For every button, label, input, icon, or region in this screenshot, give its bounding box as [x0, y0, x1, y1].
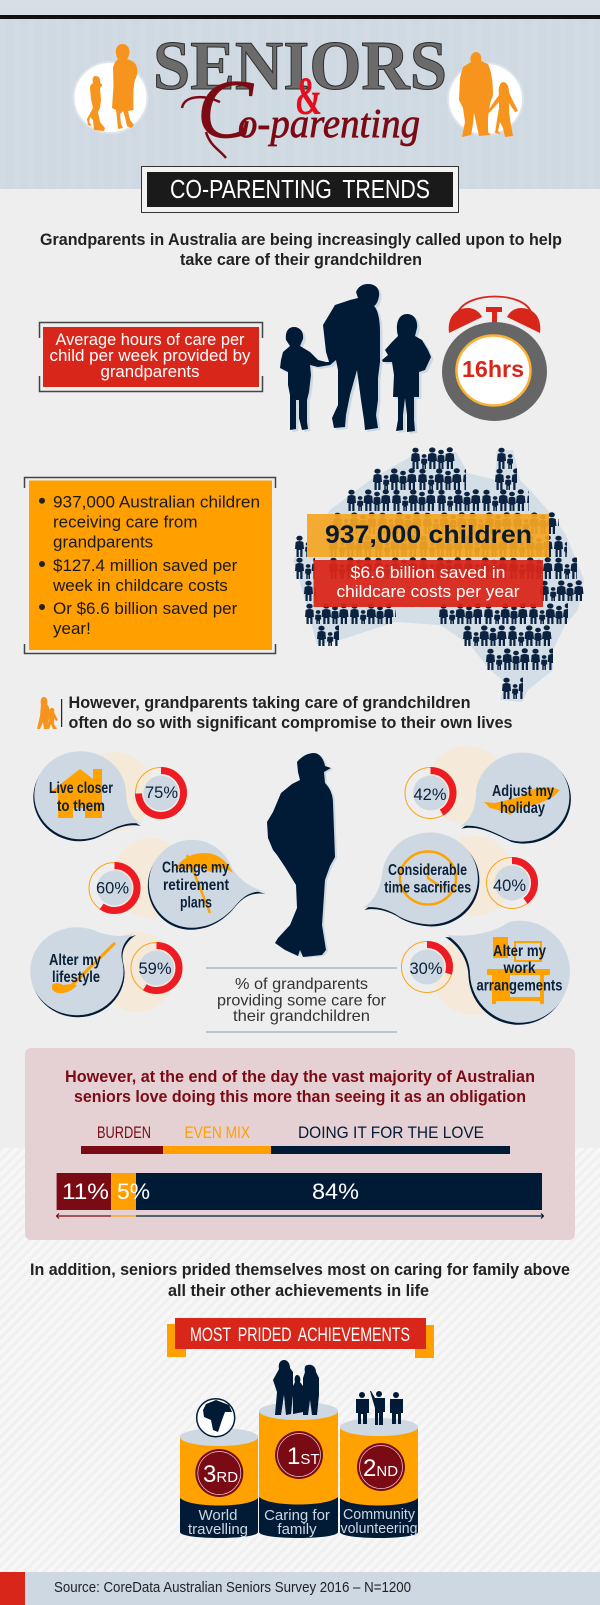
- panel: key statistics list: $127.4 million saved per: [53, 556, 238, 575]
- title: Co-parenting: o-parenting: [238, 100, 420, 146]
- silhouette: grandparent standing: [267, 753, 337, 958]
- panel: motivation stacked bar: [25, 1048, 575, 1240]
- pride text: In addition, seniors prided themselves most on caring for family above: [30, 1260, 570, 1279]
- podium: 1st caring for family: family: [277, 1521, 317, 1538]
- panel heading: [65, 1067, 535, 1106]
- callout: average hours of care: grandparents: [100, 362, 200, 381]
- map: Australia made of people: 937,000 children: [325, 521, 532, 549]
- bubble: live closer to them: Live closer: [49, 780, 113, 797]
- footer source bar: [0, 1572, 600, 1605]
- icon: grandmother and child in circle: [74, 44, 148, 133]
- podium: 3rd world travelling: World: [199, 1507, 237, 1524]
- podium: 3rd world travelling: [180, 1399, 258, 1538]
- bubble: adjust my holiday: [427, 746, 571, 844]
- panel: key statistics list: week in childcare costs: [52, 576, 228, 595]
- section heading: co-parenting trends: CO-PARENTING TRENDS: [170, 174, 430, 204]
- donut: 40%: [486, 858, 538, 908]
- bubble: alter my work arrangements: Alter my: [493, 943, 546, 960]
- bubble: alter my work arrangements: arrangements: [476, 978, 563, 994]
- bubble: change my retirement plans: plans: [180, 894, 212, 912]
- icon: golf club: [52, 943, 115, 993]
- donut: 75%: 75%: [145, 783, 178, 802]
- bubble: considerable time sacrifices: time sacrifices: [384, 880, 471, 897]
- panel heading: seniors love doing this more than seeing it as an obligation: [74, 1087, 526, 1106]
- caption: percent of grandparents: % of grandparents: [235, 976, 368, 993]
- bubble: change my retirement plans: Change my: [162, 860, 229, 877]
- icon: alarm clock 16hrs: [442, 296, 547, 421]
- panel: key statistics list: receiving care from: [53, 512, 198, 532]
- legend labels: EVEN MIX: [184, 1123, 250, 1142]
- legend labels: [97, 1123, 484, 1142]
- podium: 1st caring for family: [259, 1360, 338, 1538]
- legend labels: DOING IT FOR THE LOVE: [298, 1123, 484, 1142]
- callout: average hours of care: child per week provided by: [50, 346, 251, 365]
- donut: 30%: 30%: [410, 959, 442, 978]
- rank badge: [275, 1431, 323, 1479]
- legend bar: [81, 1146, 510, 1154]
- panel: key statistics list: [24, 478, 276, 654]
- icon: plane: [484, 787, 560, 815]
- caption: percent of grandparents: their grandchildren: [233, 1008, 370, 1025]
- bubble: live closer to them: to them: [57, 798, 105, 815]
- title: Seniors: SENIORS: [153, 28, 447, 105]
- icon: family: [273, 1360, 319, 1415]
- caption: percent of grandparents: [206, 968, 397, 1032]
- podium: 3rd world travelling: travelling: [188, 1521, 248, 1538]
- bubble: considerable time sacrifices: [363, 833, 513, 926]
- icon: umbrella: [175, 853, 233, 913]
- icon: grandfather and child in circle: [448, 52, 523, 137]
- donut: 42%: [405, 768, 456, 818]
- caption: percent of grandparents: providing some care for: [217, 992, 387, 1010]
- bubble: adjust my holiday: Adjust my: [492, 783, 554, 800]
- callout: average hours of care: Average hours of care per: [56, 330, 245, 349]
- legend labels: BURDEN: [97, 1123, 151, 1142]
- podium: 2nd community volunteering: [340, 1391, 418, 1538]
- panel: key statistics list: 937,000 Australian children: [53, 492, 260, 512]
- subheading with family icon: However, grandparents taking care of grandchildren: [68, 693, 470, 712]
- donut: 59%: [131, 942, 182, 994]
- icon: alarm clock 16hrs: 16hrs: [462, 356, 524, 382]
- rank badge: [357, 1443, 405, 1491]
- icon: clock: [400, 852, 456, 904]
- bubble: alter my lifestyle: [30, 927, 175, 1017]
- donut: 40%: 40%: [493, 876, 526, 895]
- panel heading: However, at the end of the day the vast majority of Australian: [65, 1067, 535, 1086]
- callout: average hours of care: [40, 322, 262, 392]
- podium: 1st caring for family: Caring for: [264, 1507, 330, 1524]
- arrow under bar: [56, 1214, 544, 1218]
- icon: house: [49, 769, 102, 818]
- intro text: [40, 230, 562, 269]
- rank badge: 2ND: [363, 1455, 398, 1482]
- bubble: considerable time sacrifices: Considerable: [388, 862, 467, 879]
- donut: 42%: 42%: [414, 785, 446, 804]
- pride text: all their other achievements in life: [168, 1281, 429, 1300]
- panel: key statistics list: grandparents: [53, 532, 153, 552]
- icon: desk and computer: [487, 937, 550, 1004]
- donut: 30%: [402, 942, 452, 992]
- subheading with family icon: [37, 693, 512, 732]
- stacked bar: 11%: [62, 1179, 109, 1204]
- donut: 59%: 59%: [138, 959, 172, 978]
- pride text: [30, 1260, 570, 1300]
- subheading with family icon: often do so with significant compromise to their own lives: [68, 713, 512, 732]
- stacked bar: [57, 1173, 542, 1210]
- rank badge: 3RD: [203, 1461, 238, 1488]
- banner: most prided achievements: MOST PRIDED ACHIEVEMENTS: [190, 1325, 410, 1346]
- stacked bar: 84%: [312, 1179, 359, 1204]
- bubble: change my retirement plans: [112, 838, 267, 930]
- stacked bar: 5%: [117, 1179, 150, 1204]
- bubble: alter my lifestyle: lifestyle: [52, 969, 100, 986]
- bubble: change my retirement plans: retirement: [163, 877, 230, 894]
- silhouette: grandfather with two grandchildren: [280, 284, 434, 434]
- section heading: co-parenting trends: [142, 166, 458, 212]
- map: Australia made of people: childcare costs per year: [336, 582, 520, 601]
- map: Australia made of people: $6.6 billion saved in: [350, 563, 506, 582]
- title: Co-parenting: [182, 63, 420, 158]
- header band: [0, 0, 600, 189]
- title: ampersand: &: [295, 66, 322, 126]
- panel: key statistics list: Or $6.6 billion saved per: [53, 599, 238, 618]
- podium: 2nd community volunteering: volunteering: [340, 1520, 418, 1537]
- intro text: Grandparents in Australia are being increasingly called upon to help: [40, 230, 562, 249]
- map: Australia made of people: [293, 447, 584, 702]
- bubble: adjust my holiday: holiday: [500, 800, 545, 817]
- donut: 60%: [89, 862, 140, 914]
- footer source bar: Source: CoreData Australian Seniors Survey 2016 – N=1200: [54, 1579, 411, 1596]
- podium: 2nd community volunteering: Community: [343, 1506, 415, 1523]
- icon: globe: [197, 1399, 235, 1437]
- donut: 75%: [136, 768, 186, 818]
- panel: key statistics list: year!: [53, 619, 91, 638]
- intro text: take care of their grandchildren: [180, 250, 422, 269]
- bubble: alter my work arrangements: [433, 921, 570, 1025]
- title: Co-parenting: C: [197, 63, 254, 156]
- donut: 60%: 60%: [96, 878, 129, 898]
- bubble: alter my lifestyle: Alter my: [49, 952, 101, 969]
- icon: three people: [356, 1391, 403, 1425]
- bubble: alter my work arrangements: work: [503, 960, 536, 977]
- banner: most prided achievements: [167, 1318, 434, 1358]
- bubble: live closer to them: [33, 751, 154, 841]
- rank badge: 1ST: [287, 1443, 320, 1470]
